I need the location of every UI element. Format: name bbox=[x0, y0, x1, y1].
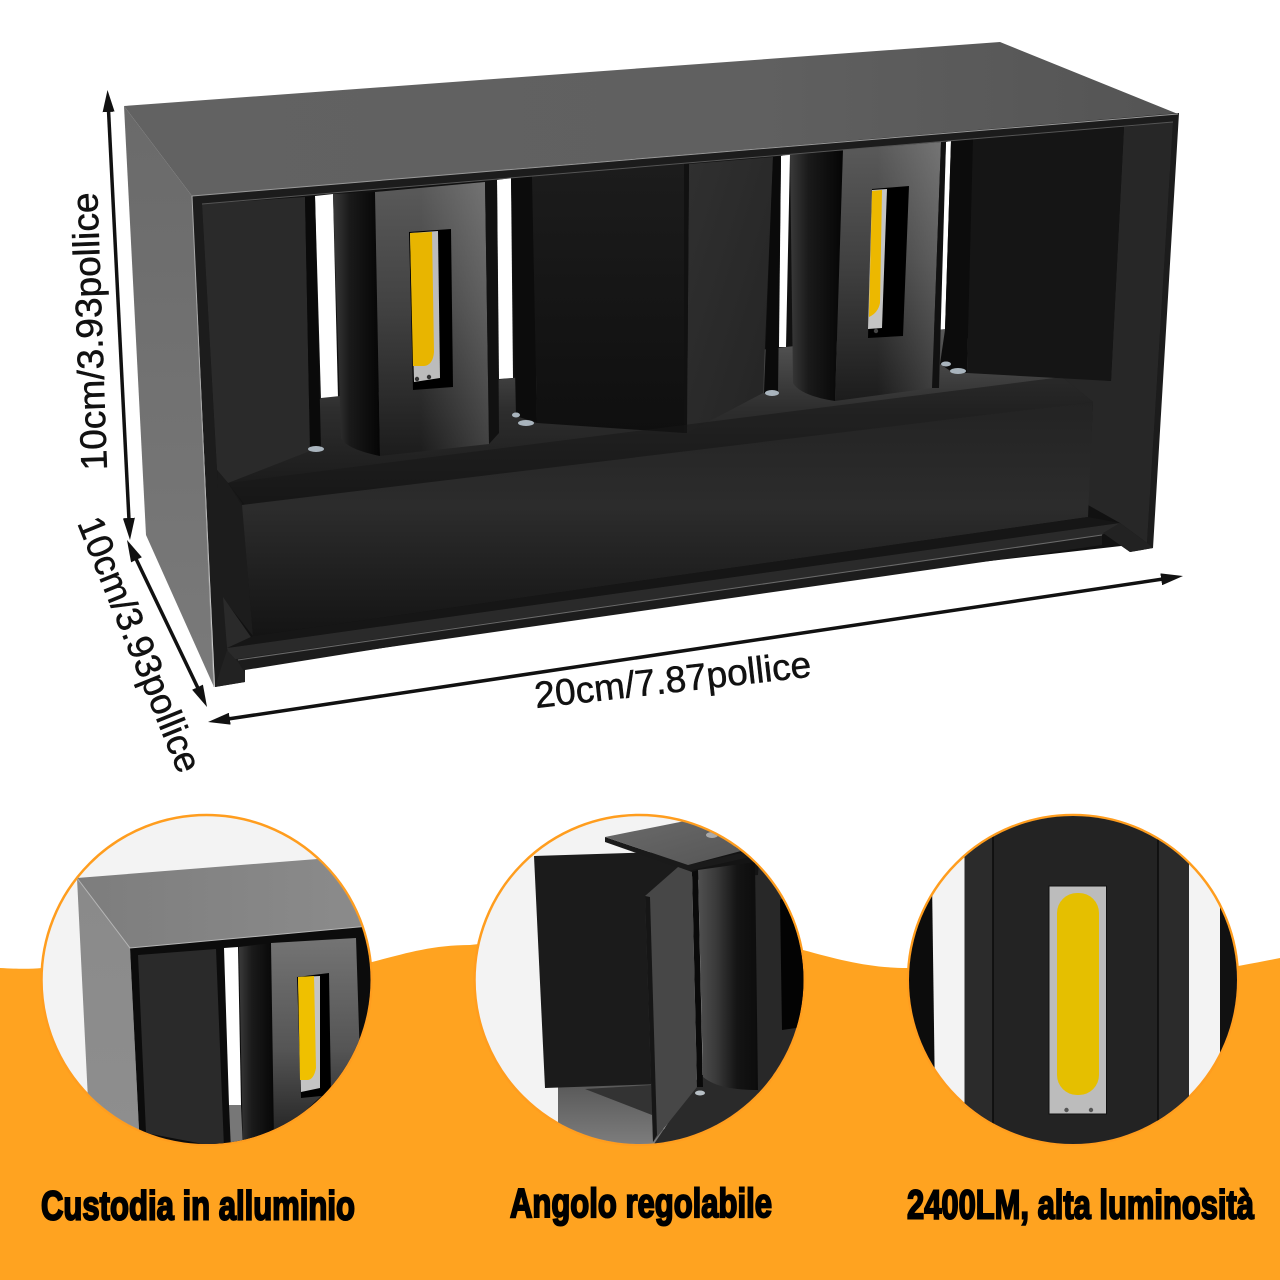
white gap 1 bbox=[315, 194, 338, 400]
rail highlight bbox=[238, 535, 1102, 660]
dimension: depth arrow bbox=[131, 549, 203, 698]
white gap 3 bbox=[779, 154, 790, 347]
vane 1 screws bbox=[415, 375, 431, 381]
plate hole bbox=[706, 832, 718, 838]
hinge strip bbox=[692, 870, 703, 1087]
centre hinge pins bbox=[512, 412, 534, 426]
orange wave background bbox=[0, 934, 1280, 1280]
top plate bbox=[605, 822, 740, 865]
right dark panel bbox=[780, 898, 804, 1030]
caption: adjustable angle: Angolo regolabile bbox=[510, 1180, 772, 1226]
side panel bbox=[138, 949, 224, 1148]
flap edge bbox=[645, 896, 657, 1142]
dimension: width arrow bbox=[218, 578, 1173, 720]
centre right strip bbox=[764, 156, 781, 393]
left lower floor bbox=[223, 597, 253, 648]
centre body bbox=[964, 810, 1189, 1150]
white gap 2 bbox=[497, 178, 513, 379]
vane 2 LED yellow strip bbox=[869, 190, 882, 317]
interior back shade bbox=[202, 122, 1173, 648]
right inner wall bbox=[1062, 122, 1173, 543]
LED yellow strip bbox=[298, 976, 316, 1080]
open flap bbox=[645, 867, 697, 1142]
dimension: height label: 10cm/3.93pollice bbox=[64, 192, 115, 471]
vane 1 cylinder bbox=[333, 192, 380, 456]
vane 1 LED yellow strip bbox=[410, 232, 434, 366]
floor below gap bbox=[229, 1105, 242, 1142]
dimension: height arrow bbox=[108, 100, 130, 530]
vane 2 face bbox=[835, 142, 941, 401]
detail circle: adjustable angle bbox=[474, 815, 810, 1150]
divider lines bbox=[992, 836, 1159, 1124]
circle backdrop bbox=[474, 815, 804, 1145]
right black strip bbox=[1220, 908, 1237, 1052]
yellow LED pill bbox=[1057, 893, 1099, 1095]
left textured bar bbox=[964, 837, 993, 1124]
vane 2 slit bbox=[868, 186, 909, 338]
detail circle: aluminium housing bbox=[42, 815, 380, 1150]
vane 2 edge strip bbox=[932, 142, 946, 388]
back floor bbox=[228, 329, 1093, 506]
circle content bbox=[77, 858, 380, 1150]
circle backdrop bbox=[908, 815, 1238, 1145]
vane 2 cylinder bbox=[790, 150, 843, 401]
right textured bar bbox=[1158, 840, 1189, 1120]
hinge pin bbox=[695, 1090, 705, 1096]
right hinge pins bbox=[941, 362, 966, 374]
cylinder column bbox=[698, 862, 758, 1090]
housing side bbox=[77, 878, 140, 1150]
centre panel left bbox=[532, 164, 684, 433]
floor shadow bbox=[585, 1085, 652, 1115]
vane 1 face bbox=[375, 182, 489, 456]
centre hinge strips bbox=[511, 176, 537, 423]
left panel bbox=[202, 197, 310, 483]
circle content bbox=[900, 810, 1250, 1150]
housing frame bbox=[130, 925, 380, 1150]
lamp left side face bbox=[124, 106, 214, 687]
vane cylinder bbox=[239, 943, 276, 1150]
board screws bbox=[1064, 1108, 1093, 1112]
vane face bbox=[271, 938, 360, 1140]
lamp top face bbox=[124, 42, 1178, 196]
circle content bbox=[534, 820, 810, 1150]
left foot lip bbox=[215, 650, 245, 687]
LED silver board bbox=[298, 976, 320, 1092]
silver LED board bbox=[1049, 886, 1106, 1114]
LED slit bbox=[297, 973, 331, 1098]
right panel bbox=[967, 127, 1124, 381]
cylinder backing bbox=[690, 846, 758, 880]
base upper rail bbox=[227, 523, 1120, 660]
caption: aluminium housing: Custodia in alluminio bbox=[41, 1182, 355, 1228]
left black strip bbox=[909, 896, 935, 1068]
floor right bbox=[654, 1075, 774, 1144]
frame highlight bbox=[77, 878, 380, 948]
left lower wall bbox=[217, 470, 253, 636]
centre panel fold strip bbox=[684, 164, 689, 433]
centre panel right bbox=[687, 157, 773, 433]
main product: wall lamp bbox=[124, 42, 1179, 687]
vane 1 edge strip bbox=[485, 180, 499, 444]
lamp front frame and interior bbox=[192, 113, 1179, 687]
floor left bbox=[558, 1084, 664, 1144]
detail circle: high brightness LED bbox=[900, 810, 1250, 1150]
vane 2 screw bbox=[874, 329, 878, 333]
white gap 4 bbox=[939, 141, 951, 330]
frame highlight lines bbox=[192, 114, 1178, 687]
right foot lip bbox=[1103, 523, 1153, 552]
vane 2 silver LED board bbox=[868, 189, 887, 329]
left hinge pin bbox=[308, 446, 324, 452]
right wall bbox=[745, 854, 804, 1094]
base top edge bbox=[228, 377, 1093, 506]
vane 1 slit bbox=[409, 229, 453, 390]
circle backdrop bbox=[42, 815, 372, 1145]
base lower rail bbox=[238, 535, 1102, 668]
housing top bbox=[77, 858, 380, 948]
centre right pin bbox=[765, 390, 779, 396]
top plate edge bbox=[605, 837, 748, 858]
vane 1 silver LED board bbox=[410, 231, 440, 382]
base front bbox=[242, 402, 1093, 636]
right hinge strips bbox=[940, 139, 973, 373]
big left vane bbox=[534, 851, 690, 1088]
left panel hinge strip bbox=[305, 196, 321, 451]
dimension: depth label: 10cm/3.93pollice bbox=[70, 511, 209, 778]
dimension: width label: 20cm/7.87pollice bbox=[532, 644, 813, 716]
base floor strip bbox=[227, 517, 1120, 648]
white gap bbox=[224, 947, 241, 1105]
